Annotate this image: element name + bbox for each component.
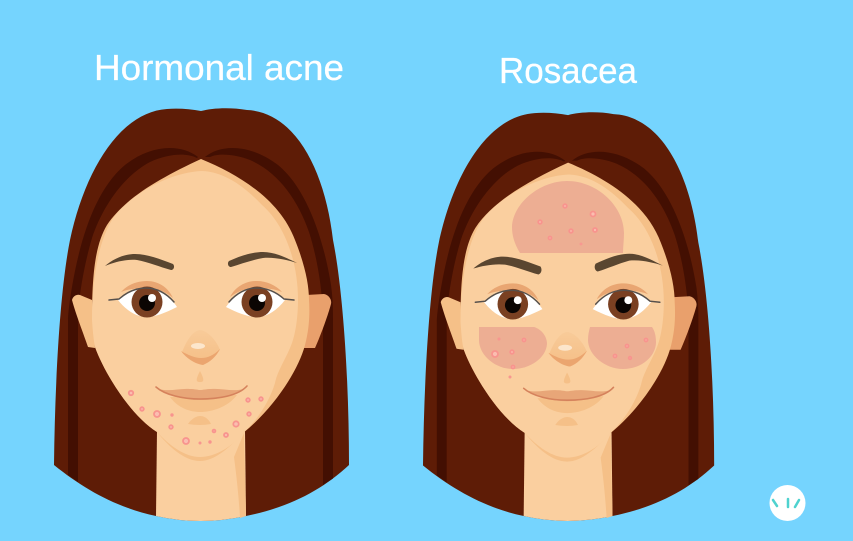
face base shadow xyxy=(461,163,675,462)
redness patch: right cheek xyxy=(588,327,656,369)
nose underside xyxy=(548,351,587,367)
lower lip shadow xyxy=(537,396,604,413)
eyebrow right xyxy=(228,252,297,267)
rosacea spots xyxy=(492,204,648,378)
ear left xyxy=(441,297,463,350)
eye left xyxy=(109,281,177,318)
title: Hormonal acne: Hormonal acne xyxy=(94,47,344,88)
hair shadow left xyxy=(68,148,198,482)
lower lip shadow xyxy=(170,395,237,412)
hair shadow left xyxy=(437,152,565,482)
ear left xyxy=(72,295,95,348)
ear right xyxy=(303,294,331,348)
neck xyxy=(524,431,613,521)
nose highlight xyxy=(558,345,572,351)
hair xyxy=(423,112,714,521)
face skin xyxy=(461,174,664,458)
acne spots xyxy=(129,391,263,444)
eyebrow left xyxy=(105,254,174,270)
neck xyxy=(156,430,246,521)
ear right xyxy=(669,296,697,350)
chin crease xyxy=(188,416,211,425)
nose xyxy=(182,330,220,365)
redness patch: forehead xyxy=(512,181,624,253)
eyebrow right xyxy=(595,254,663,272)
eye left xyxy=(475,283,542,320)
face base shadow xyxy=(92,159,309,461)
illustration: face with hormonal acne xyxy=(54,108,349,521)
mouth xyxy=(524,387,613,401)
eye right xyxy=(593,283,660,320)
eye right xyxy=(226,281,294,318)
hair shadow right xyxy=(572,152,698,485)
philtrum xyxy=(564,372,570,384)
title: Rosacea: Rosacea xyxy=(499,50,638,91)
neck shadow xyxy=(601,434,613,518)
mouth xyxy=(156,386,247,400)
face skin xyxy=(92,171,298,457)
philtrum xyxy=(197,371,203,382)
illustration: face with rosacea xyxy=(423,112,714,521)
chin crease xyxy=(555,417,578,426)
icon: logo badge xyxy=(770,485,806,521)
nose underside xyxy=(181,349,220,365)
eyebrow left xyxy=(473,257,541,274)
redness patch: left cheek xyxy=(479,327,547,369)
hair xyxy=(54,108,349,521)
hair shadow right xyxy=(205,148,333,485)
neck shadow xyxy=(234,433,246,518)
nose xyxy=(549,332,587,367)
nose highlight xyxy=(191,343,205,349)
